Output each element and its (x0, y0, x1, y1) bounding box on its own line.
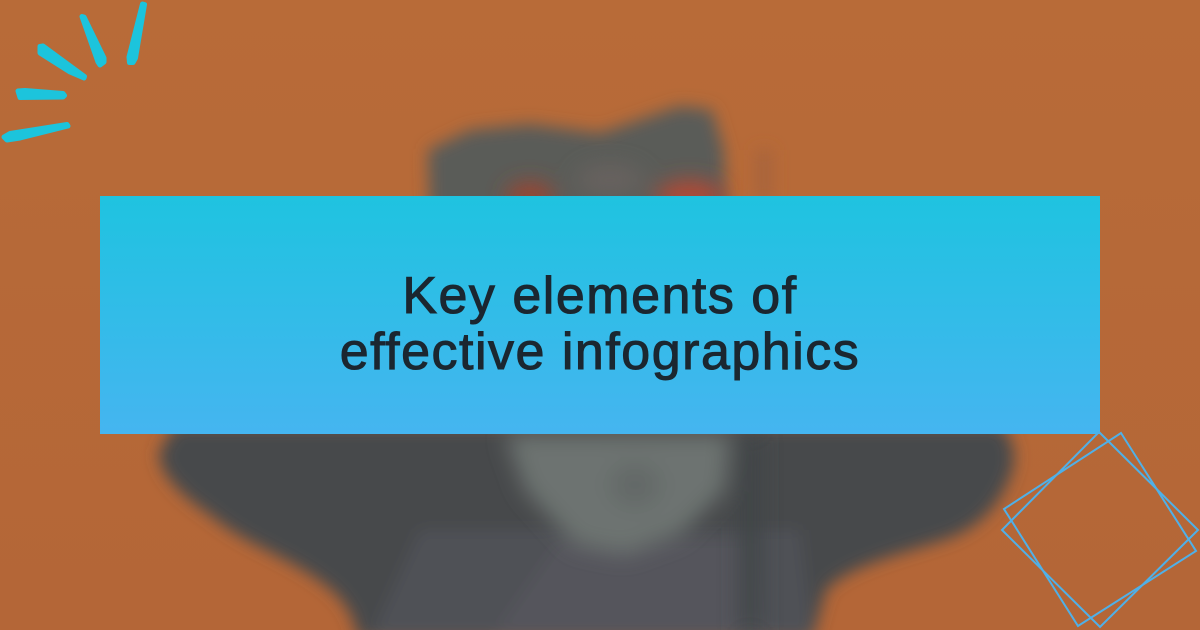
title (340, 267, 860, 381)
title: effective infographics (340, 323, 860, 381)
title panel (100, 196, 1100, 434)
title: Key elements of (402, 267, 798, 325)
